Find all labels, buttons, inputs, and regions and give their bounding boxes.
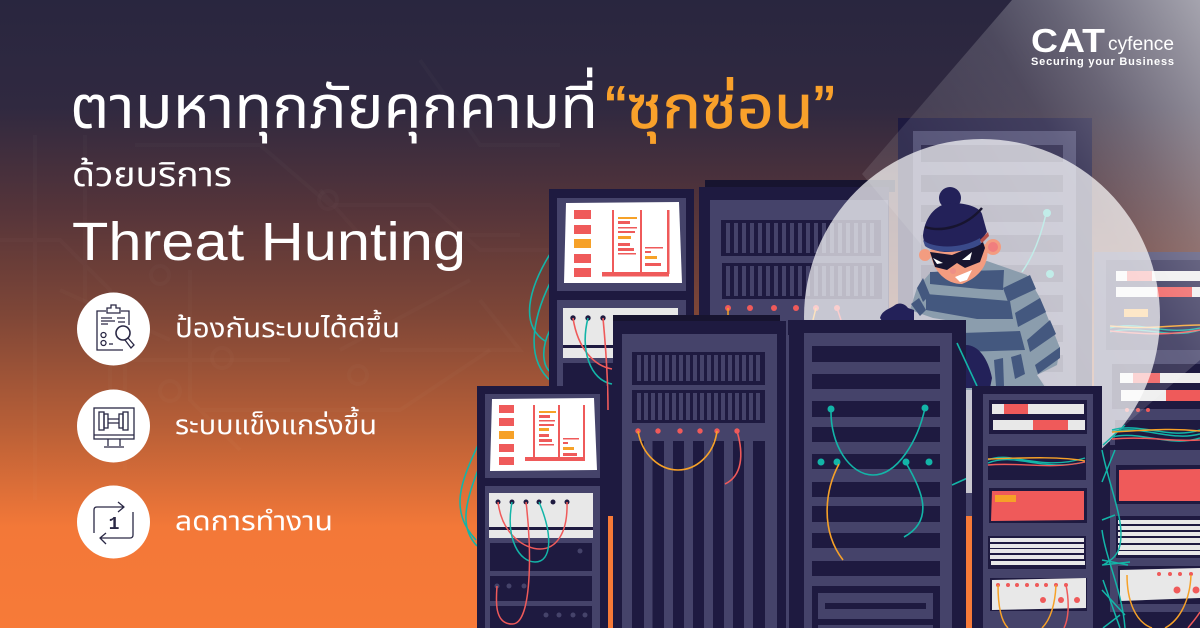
logo: CAT cyfence [1031, 22, 1174, 68]
logo: CAT cyfence: Securing your Business [1031, 56, 1174, 68]
spotlight beam [862, 0, 1200, 445]
monitor [557, 198, 686, 291]
benefit 3 [77, 486, 333, 558]
patch panel [485, 486, 600, 628]
patch panel [557, 300, 686, 628]
server rack: centre right [788, 320, 977, 628]
heading line 2: ด้วยบริการ [72, 156, 232, 194]
cables at right edge [1102, 425, 1200, 628]
heading line 1: ตามหาทุกภัยคุกคามที่ [70, 67, 598, 144]
icon: repeat once arrows: 1 [109, 515, 120, 535]
label: ลดการทำงาน [175, 506, 333, 536]
label: ระบบแข็งแกร่งขึ้น [175, 406, 377, 440]
icon: clipboard with magnifier [77, 292, 150, 366]
lower units [1102, 445, 1200, 628]
sweater stripes [911, 270, 1060, 386]
benefit 1 [77, 292, 400, 366]
server rack: middle left [699, 180, 895, 628]
server rack: far right [1094, 252, 1200, 628]
circuit pattern background [0, 60, 620, 500]
server rack: right front [972, 386, 1102, 628]
icon: monitor with dumbbell [77, 390, 150, 462]
orange gap strip [608, 516, 614, 628]
label: ป้องกันระบบได้ดีขึ้น [175, 309, 400, 343]
thief hat [939, 187, 961, 209]
logo: CAT cyfence: CAT [1031, 22, 1105, 59]
monitor [485, 394, 600, 478]
thief body sweater [910, 261, 1060, 390]
icon: repeat once arrows [77, 486, 150, 558]
thief [880, 187, 1060, 390]
server rack with screen: bottom left [460, 386, 607, 628]
thief gloves [880, 304, 914, 324]
heading line 1 [70, 67, 835, 144]
server rack: rear centre [898, 118, 1092, 628]
server rack with screen: upper left [530, 189, 694, 628]
thief mask [930, 242, 985, 270]
thief face [930, 244, 988, 284]
benefit 2 [77, 390, 377, 462]
light sliver and orange strip between racks [966, 409, 972, 628]
heading line 1: “ซุกซ่อน” [605, 74, 835, 144]
server rack: centre front [613, 315, 786, 628]
spotlight circle [804, 139, 1160, 495]
heading line 3: Threat Hunting [72, 212, 466, 272]
logo: CAT cyfence: cyfence [1108, 34, 1174, 55]
